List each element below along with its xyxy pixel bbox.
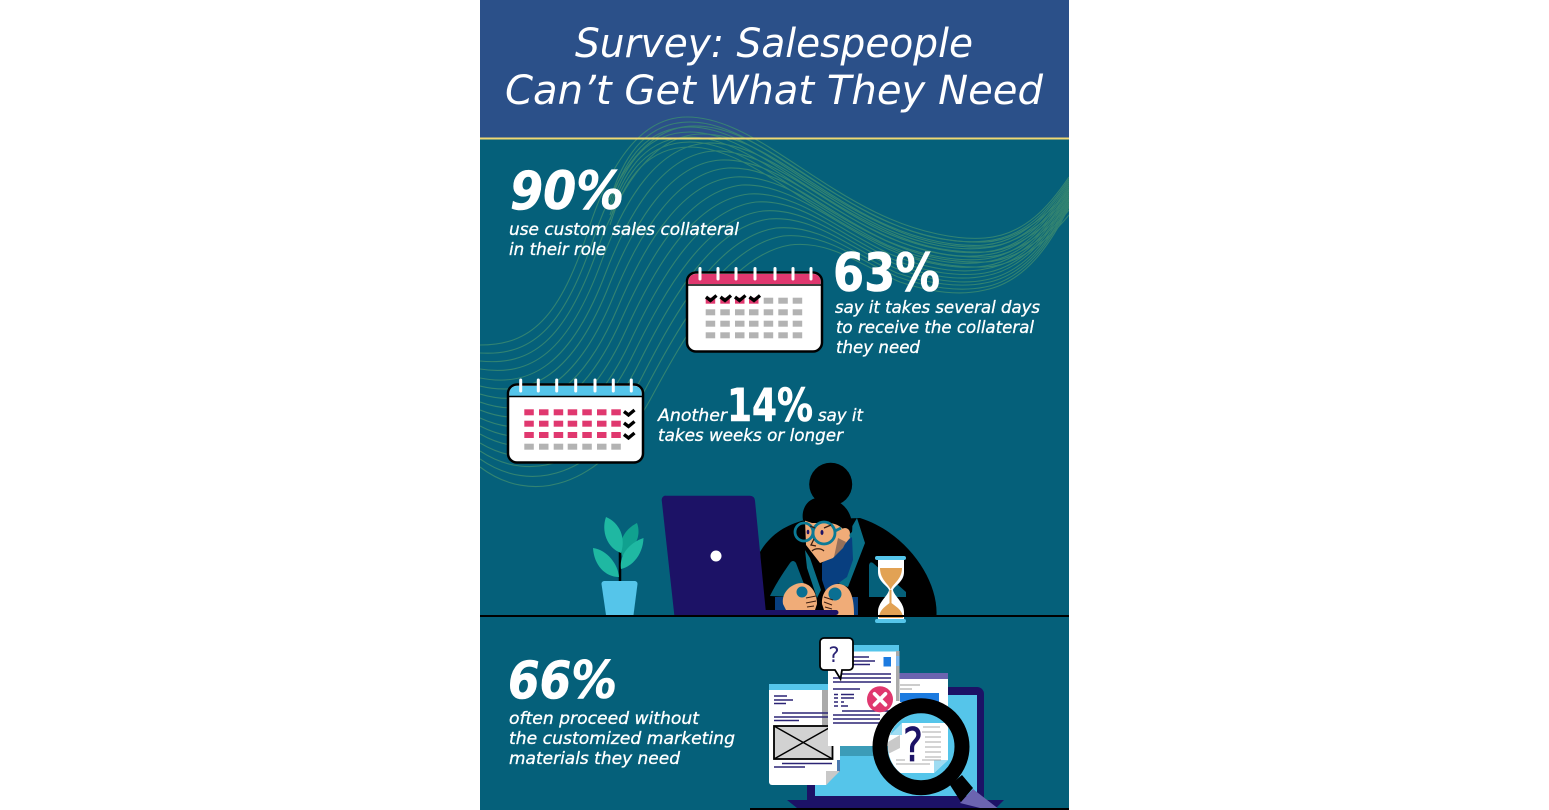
- document: centre: [828, 645, 900, 746]
- icon: calendar with blue header: [508, 380, 643, 462]
- panel: teal background: [480, 0, 1069, 810]
- stat: 14%: takes weeks or longer: [658, 426, 844, 446]
- title: [505, 21, 1044, 114]
- icon: error badge: [867, 686, 893, 712]
- icon: calendar with pink header: [687, 268, 822, 352]
- stat: 66%: materials they need: [509, 749, 680, 769]
- icon: plant: [593, 517, 644, 615]
- hair bun: [809, 463, 852, 506]
- illustration: laptop with documents and magnifier: [769, 638, 1004, 810]
- laptop: [807, 687, 984, 800]
- stat: 63%: they need: [836, 338, 920, 358]
- stat: 63%: [833, 243, 1040, 358]
- illustration: frustrated woman at laptop: [662, 463, 937, 615]
- jacket lapels: [770, 561, 804, 597]
- stat: 14%: [657, 379, 864, 446]
- stat: 90%: in their role: [509, 240, 606, 260]
- document: left with image placeholder: [769, 684, 840, 785]
- title: Can’t Get What They Need: [505, 68, 1044, 114]
- stat: 14%: Another: [657, 406, 728, 426]
- panel: title band: [480, 0, 1069, 138]
- glasses: [795, 522, 841, 544]
- icon: speech bubble with question mark: [820, 638, 853, 679]
- desk line: [480, 615, 1069, 617]
- stat: 90%: use custom sales collateral: [509, 220, 739, 240]
- scarf: [822, 537, 853, 592]
- icon: magnifying glass: [880, 706, 1000, 810]
- stat: 14%: say it: [818, 406, 864, 426]
- stat: 66%: [508, 651, 735, 769]
- stat: 63%: 63%: [833, 243, 940, 304]
- document: right: [899, 673, 948, 743]
- stat: 66%: the customized marketing: [509, 729, 735, 749]
- head: [805, 520, 850, 563]
- sleeves: [775, 597, 790, 610]
- hands: [783, 583, 817, 610]
- ground line: [750, 808, 1069, 810]
- eyes and mouth: [810, 525, 831, 551]
- stat: 63%: to receive the collateral: [836, 318, 1034, 338]
- icon: magnifying glass: ?: [903, 718, 923, 772]
- stat: 66%: 66%: [508, 651, 617, 711]
- shadow block: [840, 746, 874, 756]
- stat: 90%: [509, 161, 739, 260]
- stat: 14%: 14%: [727, 379, 813, 432]
- stat: 90%: 90%: [510, 161, 624, 222]
- icon: speech bubble with question mark: ?: [828, 643, 840, 667]
- body: [760, 518, 937, 615]
- laptop: [662, 496, 838, 615]
- title: Survey: Salespeople: [575, 21, 973, 67]
- icon: hourglass: [875, 556, 906, 623]
- stat: 63%: say it takes several days: [835, 298, 1040, 318]
- hair: [803, 497, 852, 536]
- stat: 66%: often proceed without: [509, 709, 700, 729]
